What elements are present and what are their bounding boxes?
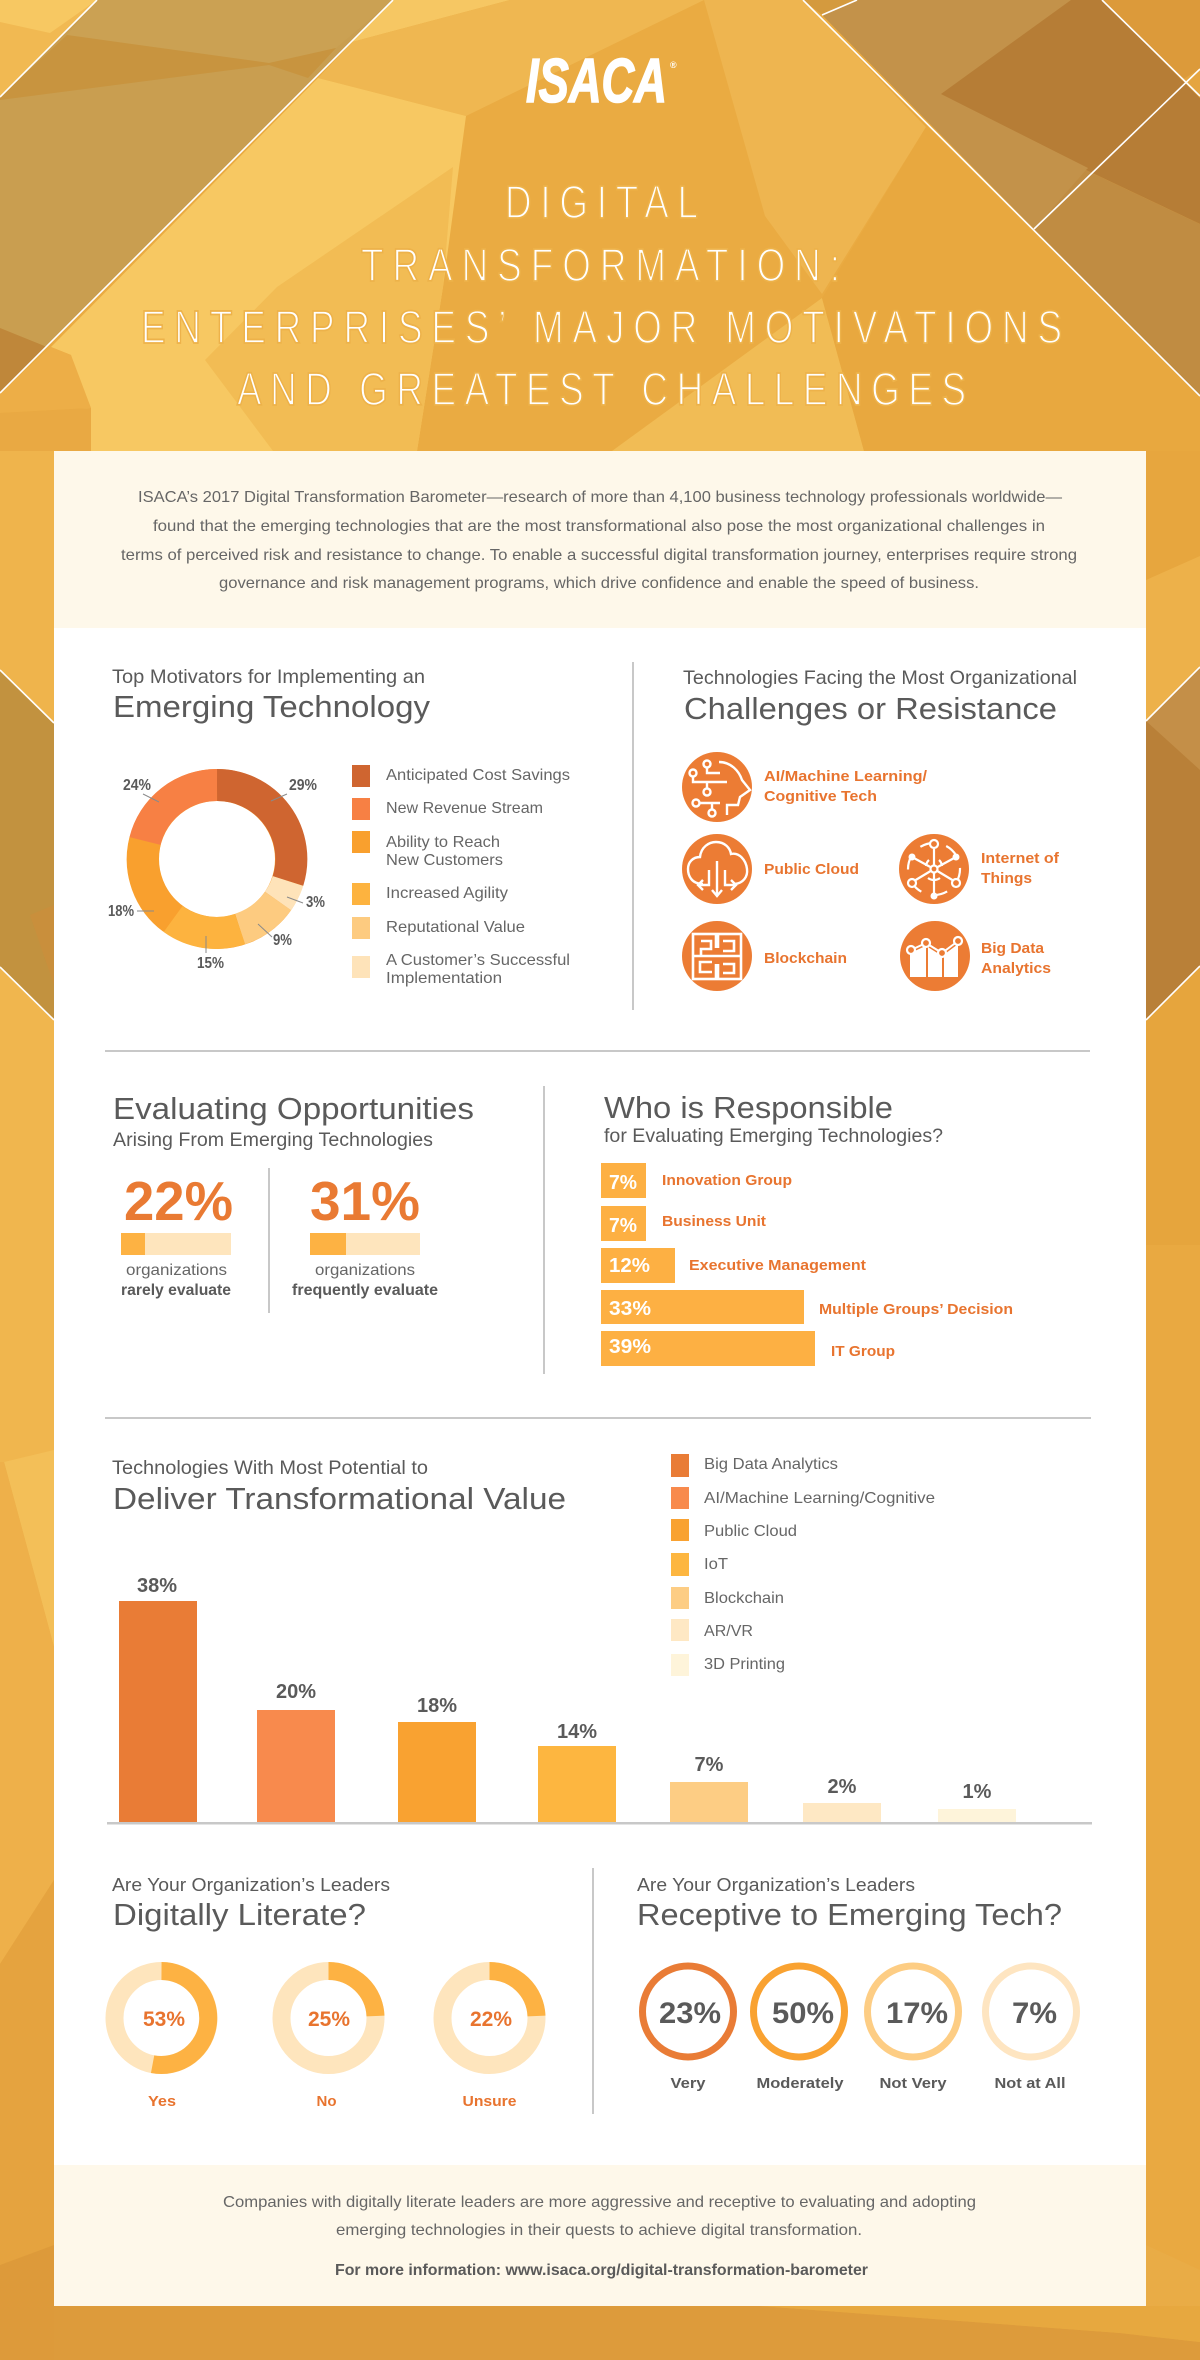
ring: 17% not very: Not Very [880,2075,947,2092]
icon labels: Cognitive Tech [764,788,877,805]
intro text [121,489,1077,592]
ring: 7% not at all: Not at All [994,2075,1066,2092]
ring: 23% very: 23% [659,1997,721,2030]
panel: who is responsible [601,1090,1013,1366]
heading: Deliver Transformational Value [113,1481,566,1516]
bar chart: 7% [695,1754,724,1776]
horizontal bar chart: IT Group [831,1343,895,1360]
icon labels [764,768,1060,977]
heading [112,1457,566,1516]
donut: 53% yes: 53% [143,2008,185,2031]
footer text: For more information: www.isaca.org/digital-transformation-barometer [335,2262,868,2279]
horizontal bar chart: Business Unit [662,1213,766,1230]
panel: footer [54,2165,1146,2306]
heading: Receptive to Emerging Tech? [637,1897,1062,1932]
heading: Are Your Organization’s Leaders [112,1874,390,1895]
donut: 53% yes [114,1971,208,2110]
ring: 50% moderately: 50% [772,1997,834,2030]
heading: Arising From Emerging Technologies [113,1129,433,1151]
horizontal bar chart: Executive Management [689,1257,866,1274]
icon: AI head [682,752,752,822]
legend: Reputational Value [386,919,525,936]
panel: digitally literate [112,1874,536,2110]
legend: Ability to Reach [386,834,500,851]
heading [112,666,431,724]
logo: ISACA: ISACA [526,47,667,116]
panel: top motivators [108,666,570,987]
legend: 3D Printing [704,1656,785,1673]
intro text: ISACA’s 2017 Digital Transformation Barometer—research of more than 4,100 business technology professionals worldwide— [138,489,1062,506]
stat: 22% rarely evaluate: 22% [124,1170,233,1232]
legend: AR/VR [704,1623,753,1640]
icon labels: Things [981,870,1032,887]
legend: Public Cloud [704,1523,797,1540]
icon: blockchain [682,921,752,991]
stat: 22% rarely evaluate: organizations [126,1262,227,1279]
title: ENTERPRISES’ MAJOR MOTIVATIONS [141,301,1062,353]
donut: 25% no: 25% [308,2008,350,2031]
heading: Challenges or Resistance [684,691,1057,726]
heading: Evaluating Opportunities [113,1091,474,1126]
stat: 22% rarely evaluate: rarely evaluate [121,1282,231,1299]
panel: technologies facing challenges [682,667,1077,991]
panel: white content sheet [54,451,1146,2306]
legend: Big Data Analytics [704,1456,838,1473]
legend: A Customer’s Successful [386,952,570,969]
horizontal bar chart: 39% [609,1336,651,1358]
legend: Increased Agility [386,885,508,902]
horizontal bar chart: Innovation Group [662,1172,792,1189]
legend: New Customers [386,852,503,869]
legend: IoT [704,1556,728,1573]
icon labels: Internet of [981,850,1060,867]
icon: big data analytics [900,921,970,991]
footer text [223,2194,976,2279]
donut: 22% unsure [442,1971,536,2110]
footer text: emerging technologies in their quests to achieve digital transformation. [336,2222,862,2239]
panel: receptive to emerging tech [637,1874,1076,2092]
donut chart: 15% [197,955,224,972]
panel: transformational value [107,1454,1092,1824]
icon labels: Public Cloud [764,861,859,878]
bar chart: 14% [557,1721,597,1743]
logo: ISACA: ® [670,60,677,70]
heading [604,1090,943,1147]
stat: 31% frequently evaluate [292,1170,438,1299]
stat: 31% frequently evaluate: 31% [310,1170,420,1232]
ring: 17% not very: 17% [886,1997,948,2030]
donut chart: 3% [306,894,325,911]
heading: Top Motivators for Implementing an [112,666,425,688]
heading: Are Your Organization’s Leaders [637,1874,915,1895]
heading: Who is Responsible [604,1090,893,1125]
ring: 23% very: Very [670,2075,706,2092]
legend: AI/Machine Learning/Cognitive [704,1490,935,1507]
intro text: terms of perceived risk and resistance to change. To enable a successful digital transformation journey, enterprises require strong [121,547,1077,564]
bar chart: 2% [828,1776,857,1798]
donut: 53% yes: Yes [148,2093,176,2110]
panel: intro [54,451,1146,628]
title: TRANSFORMATION: [361,239,840,291]
background: white diagonal lines [0,0,1200,1020]
donut chart [108,777,325,972]
footer text: Companies with digitally literate leaders are more aggressive and receptive to evaluating and adopting [223,2194,976,2211]
heading [112,1874,390,1932]
bar chart: 18% [417,1695,457,1717]
title: AND GREATEST CHALLENGES [237,363,966,415]
ring: 50% moderately: Moderately [756,2075,844,2092]
legend [671,1454,935,1676]
heading [113,1091,474,1151]
legend: Blockchain [704,1590,784,1607]
legend: Implementation [386,970,502,987]
intro text: found that the emerging technologies that are the most transformational also pose the most organizational challenges in [153,518,1045,535]
bar chart: 1% [963,1781,992,1803]
title [141,176,1062,415]
heading: Technologies Facing the Most Organizational [683,667,1077,689]
title: DIGITAL [505,176,698,228]
bar chart: 20% [276,1681,316,1703]
horizontal bar chart: 12% [609,1255,650,1277]
ring: 7% not at all [986,1966,1076,2092]
horizontal bar chart: 7% [609,1172,637,1194]
ring: 50% moderately [754,1966,844,2092]
horizontal bar chart: Multiple Groups’ Decision [819,1301,1013,1318]
ring: 17% not very [868,1966,958,2092]
stat: 31% frequently evaluate: frequently evaluate [292,1282,438,1299]
heading: Emerging Technology [113,689,431,724]
icon: internet of things [899,834,969,904]
stat: 31% frequently evaluate: organizations [315,1262,415,1279]
horizontal bar chart: 33% [609,1298,651,1320]
legend [352,765,570,987]
donut chart: 29% [289,777,317,794]
stat: 22% rarely evaluate [121,1170,233,1299]
horizontal bar chart [601,1163,1013,1366]
ring: 23% very [642,1966,734,2092]
ring: 7% not at all: 7% [1012,1997,1057,2030]
heading: Digitally Literate? [113,1897,366,1932]
icon labels: AI/Machine Learning/ [764,768,928,785]
icon labels: Big Data [981,940,1045,957]
heading [683,667,1077,726]
donut: 25% no [282,1971,376,2110]
icon: public cloud [682,834,752,904]
icon labels: Analytics [981,960,1051,977]
bar chart: 38% [137,1575,177,1597]
intro text: governance and risk management programs, which drive confidence and enable the speed of business. [219,575,979,592]
donut chart: 18% [108,903,134,920]
icon labels: Blockchain [764,950,847,967]
donut: 22% unsure: Unsure [462,2093,516,2110]
panel: evaluating opportunities [113,1091,474,1313]
heading: for Evaluating Emerging Technologies? [604,1125,943,1147]
legend: Anticipated Cost Savings [386,767,570,784]
donut: 22% unsure: 22% [470,2008,512,2031]
horizontal bar chart: 7% [609,1215,637,1237]
donut: 25% no: No [316,2093,336,2110]
legend: New Revenue Stream [386,800,543,817]
heading [637,1874,1062,1932]
heading: Technologies With Most Potential to [112,1457,428,1479]
donut chart: 9% [273,932,292,949]
bar chart [107,1575,1092,1824]
donut chart: 24% [123,777,151,794]
